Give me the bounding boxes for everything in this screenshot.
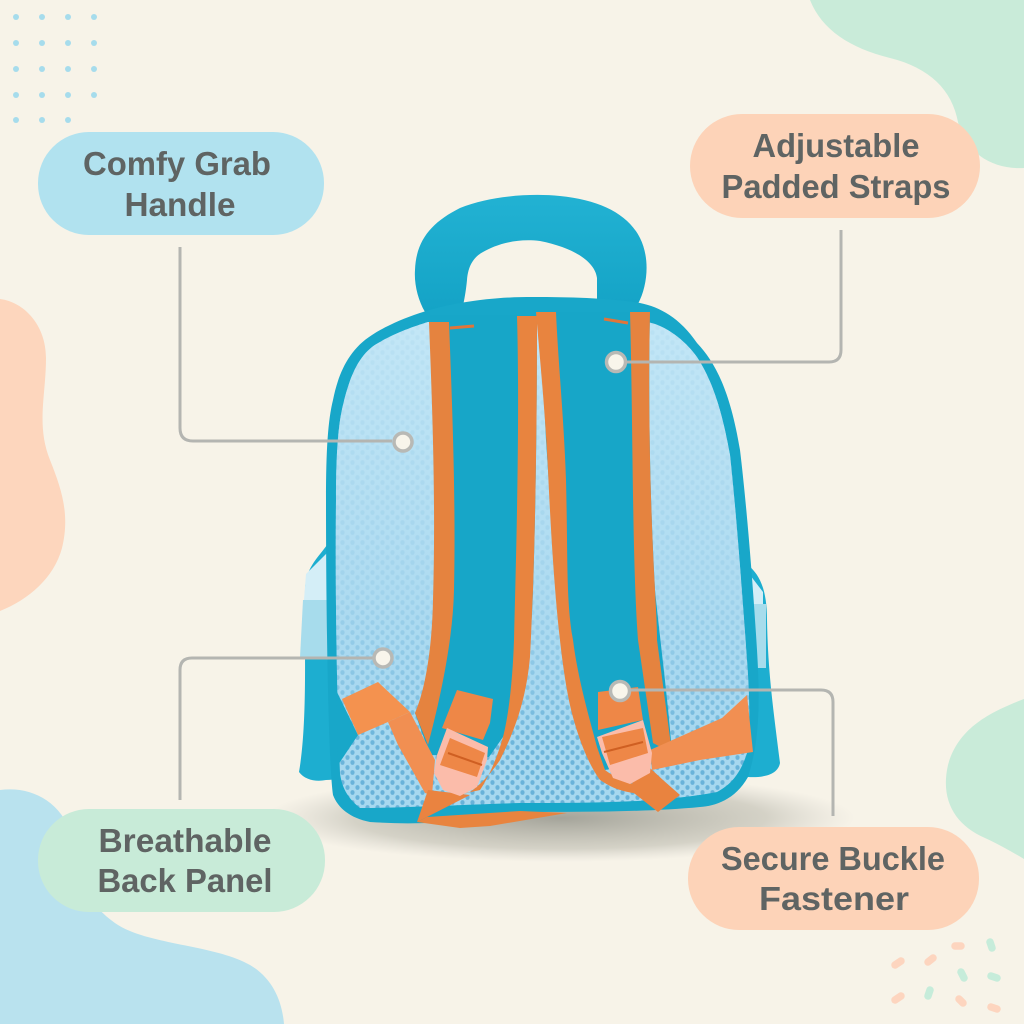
connector: padded straps [606,230,841,372]
side pocket left [299,545,345,781]
label: Comfy Grab Handle: Comfy Grab [83,145,271,182]
right buckle [597,720,652,784]
blob: bottom left blue [0,789,284,1024]
label: Breathable Back Panel: Back Panel [98,862,272,899]
label: Comfy Grab Handle [38,132,324,235]
right shoulder strap [450,312,672,793]
label: Comfy Grab Handle: Handle [124,186,236,223]
left lower webbing [342,682,493,822]
bottom flap [417,811,567,828]
label: Adjustable Padded Straps: Adjustable [752,127,920,164]
left shoulder strap [415,315,537,798]
dot grid: top left [13,14,97,123]
side pocket right [748,565,780,777]
label: Adjustable Padded Straps: Padded Straps [722,168,950,205]
label: Adjustable Padded Straps [690,114,980,218]
label: Breathable Back Panel [38,809,325,912]
left buckle [434,728,488,796]
breathable mesh panel [336,322,749,808]
connector: back panel [180,649,392,800]
teal wedge: lower left corner [336,690,358,765]
label: Breathable Back Panel: Breathable [98,822,272,859]
confetti: bottom right [895,942,997,1009]
connector: grab handle [180,247,412,451]
label: Secure Buckle Fastener [688,827,979,930]
blob: left peach [0,299,65,611]
body shell [326,297,759,823]
label: Secure Buckle Fastener: Secure Buckle [721,840,945,877]
blob: top right mint [810,0,1024,168]
blob: right mint [946,699,1024,859]
backpack shadow [265,774,855,862]
label: Secure Buckle Fastener: Fastener [759,880,909,917]
backpack illustration [299,195,780,828]
connector: buckle [610,682,833,816]
right lower webbing [598,687,753,812]
grab handle [415,195,647,312]
